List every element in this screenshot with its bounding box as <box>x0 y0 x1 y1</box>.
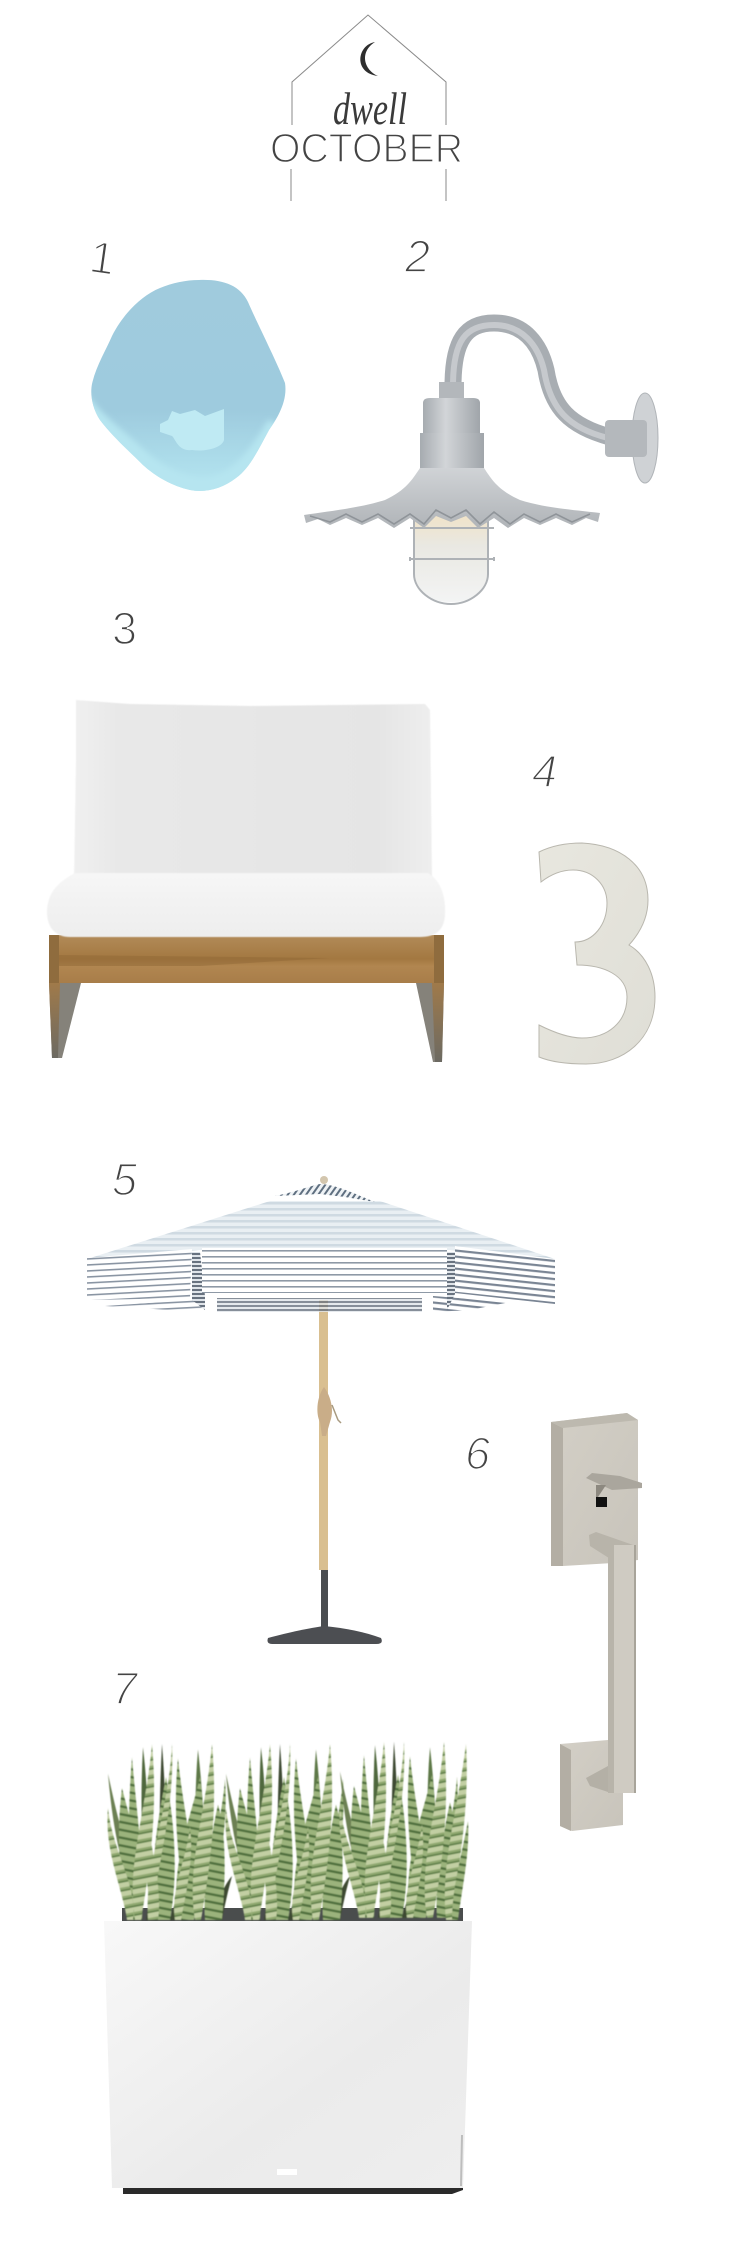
striped patio umbrella <box>87 1176 555 1644</box>
upper plate <box>551 1413 638 1566</box>
under valance <box>217 1298 422 1312</box>
lower connector <box>586 1766 608 1792</box>
planter corner shadow <box>460 2135 463 2186</box>
canopy top <box>87 1201 555 1259</box>
outdoor armless chair <box>47 700 445 1062</box>
number 2: 2 <box>404 231 430 282</box>
finial <box>320 1176 328 1184</box>
seat cushion <box>47 873 445 937</box>
umbrella base <box>268 1626 382 1644</box>
panel folds <box>192 1252 205 1310</box>
lower pole <box>321 1570 328 1628</box>
thumb latch <box>586 1473 642 1490</box>
number 7: 7 <box>112 1663 139 1714</box>
door handle <box>551 1413 642 1831</box>
key slot <box>596 1497 607 1507</box>
planter body <box>104 1921 472 2188</box>
planter logo <box>277 2169 297 2175</box>
wall plate <box>632 393 658 483</box>
title: October: OCTOBER <box>270 125 463 171</box>
snake plant clusters <box>107 1742 468 1920</box>
number 5: 5 <box>112 1154 138 1205</box>
number 4: 4 <box>532 746 557 797</box>
pole <box>319 1300 328 1570</box>
paint swatch blob <box>85 280 290 500</box>
brand word: dwell: dwell <box>333 83 407 134</box>
upper connector <box>589 1532 636 1560</box>
socket cylinders <box>423 398 480 433</box>
infographic canvas <box>47 14 658 2194</box>
planter with snake plants <box>104 1742 472 2194</box>
paint lower rim highlight <box>92 399 274 491</box>
house outline <box>291 15 446 201</box>
side panels <box>87 1249 192 1300</box>
top vent flap <box>275 1184 375 1202</box>
number 1: 1 <box>86 231 118 285</box>
lower plate <box>560 1740 623 1831</box>
collar <box>439 382 464 399</box>
wood frame <box>49 935 444 983</box>
paint reflection <box>160 409 224 451</box>
front panel <box>202 1248 447 1293</box>
bracket <box>605 420 647 457</box>
barn lamp <box>304 323 658 604</box>
planter base shadow <box>123 2188 463 2194</box>
wire cage <box>410 510 494 604</box>
gooseneck arm <box>453 323 610 437</box>
chair legs <box>49 983 81 1058</box>
glass globe <box>414 508 488 602</box>
icon: crescent moon <box>360 42 378 76</box>
pole tilt crank <box>317 1387 332 1436</box>
shade <box>304 468 600 528</box>
grip <box>608 1545 636 1793</box>
number 3: 3 <box>112 603 137 654</box>
number 6: 6 <box>465 1428 491 1479</box>
planter interior <box>122 1908 463 1922</box>
header logo <box>270 15 463 201</box>
house number 3 <box>539 843 655 1064</box>
back cushion <box>74 700 432 880</box>
